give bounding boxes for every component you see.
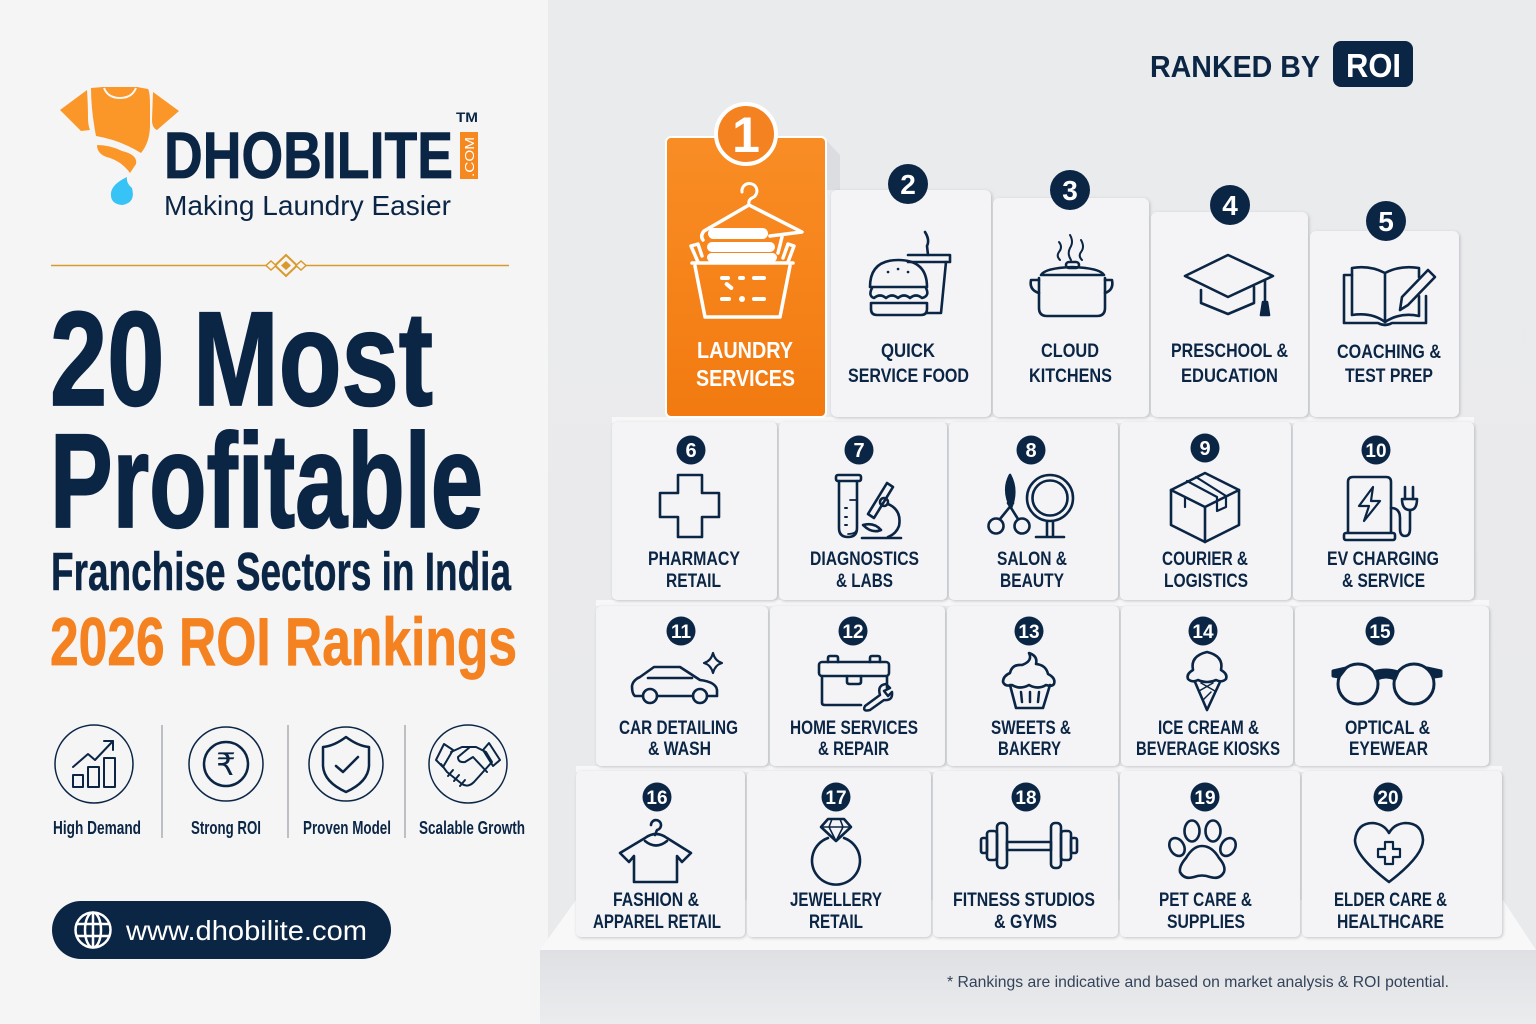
label: [1136, 718, 1280, 760]
label: PHARMACY: [648, 549, 740, 570]
label: HOME SERVICES: [790, 718, 918, 739]
floor platform: [0, 900, 1536, 1024]
logo: Dhobilite: [60, 87, 478, 221]
card 7: diagnostics and labs: [779, 422, 947, 600]
badge 3: [1050, 170, 1090, 210]
card 10: ev charging and service: [1293, 422, 1474, 600]
card 2: quick service food: [831, 164, 991, 417]
label: & GYMS: [994, 912, 1057, 933]
card 4: preschool and education: [1151, 185, 1308, 417]
label: JEWELLERY: [790, 890, 882, 911]
label: [997, 549, 1067, 592]
label: COACHING &: [1337, 342, 1441, 363]
label: BAKERY: [998, 739, 1061, 760]
icon: eyeglasses: [1333, 664, 1441, 704]
label: KITCHENS: [1029, 366, 1112, 387]
icon: book and pencil: [1344, 267, 1435, 325]
card 12: home services and repair: [770, 606, 945, 766]
label: [1029, 341, 1112, 387]
tagline: Making Laundry Easier: [164, 190, 451, 221]
feature: strong ROI: [189, 727, 263, 838]
divider with ornament: [51, 255, 509, 276]
label: & LABS: [836, 571, 893, 592]
label: COURIER &: [1162, 549, 1248, 570]
label: RETAIL: [666, 571, 721, 592]
icon: parcel box: [1171, 473, 1239, 542]
feature: scalable growth: Scalable Growth: [419, 818, 525, 838]
badge 18: [1012, 782, 1040, 812]
card 16: fashion and apparel retail: [576, 771, 745, 937]
label: APPAREL RETAIL: [593, 912, 721, 933]
icon: graduation cap: [1185, 255, 1273, 315]
badge 19: [1190, 782, 1220, 812]
card 19: pet care and supplies: [1120, 771, 1300, 937]
label: [1327, 549, 1439, 592]
label: & SERVICE: [1342, 571, 1425, 592]
icon: laundry basket: [691, 183, 802, 317]
badge 2: [888, 164, 928, 204]
badge 12: [838, 616, 868, 646]
icon: scissors and mirror: [988, 475, 1073, 537]
badge 18: 18: [1015, 788, 1037, 809]
label: LOGISTICS: [1164, 571, 1248, 592]
badge 6: 6: [685, 440, 697, 462]
badge 10: 10: [1365, 441, 1387, 462]
badge 8: 8: [1025, 440, 1037, 462]
title: 20 Most: [50, 285, 433, 434]
label: [1334, 890, 1447, 933]
badge 19: 19: [1194, 788, 1216, 809]
badge 12: 12: [842, 622, 864, 643]
feature separators: [162, 725, 405, 838]
badge 10: [1362, 436, 1390, 464]
label: QUICK: [881, 341, 935, 362]
label: ICE CREAM &: [1158, 718, 1259, 739]
badge 5: [1366, 201, 1406, 241]
label: SUPPLIES: [1167, 912, 1245, 933]
badge 9: 9: [1199, 438, 1211, 460]
label: BEVERAGE KIOSKS: [1136, 739, 1280, 760]
card 11: car detailing and wash: [596, 606, 768, 766]
label: [810, 549, 919, 592]
trademark: TM: [456, 109, 478, 125]
badge 17: [822, 782, 850, 812]
badge 1: 1: [732, 107, 760, 163]
badge 14: [1188, 616, 1218, 646]
label: HEALTHCARE: [1337, 912, 1444, 933]
badge 1: [716, 104, 776, 164]
label: OPTICAL &: [1345, 718, 1430, 739]
badge 5: 5: [1378, 206, 1394, 237]
title: Franchise Sectors in India: [51, 542, 512, 602]
icon: car with sparkle: [632, 653, 722, 703]
website pill: [52, 901, 391, 959]
feature: proven model: [303, 727, 391, 838]
icon: heart with plus: [1355, 823, 1423, 882]
card 9: courier and logistics: [1120, 422, 1291, 600]
card 13: sweets and bakery: [947, 606, 1119, 766]
website url: www.dhobilite.com: [125, 915, 367, 946]
badge 6: [676, 436, 706, 464]
badge 11: 11: [671, 622, 691, 643]
label: [790, 890, 882, 933]
card 6: pharmacy retail: [612, 422, 777, 600]
.com tag: .COM: [462, 137, 477, 177]
badge 9: [1190, 434, 1220, 462]
icon: ev charger: [1344, 477, 1417, 540]
stair band shading: [576, 417, 1502, 772]
badge 15: [1366, 616, 1394, 646]
label: PET CARE &: [1159, 890, 1252, 911]
icon: cooking pot: [1031, 235, 1112, 316]
card 18: fitness studios and gyms: [933, 771, 1118, 937]
card 15: optical and eyewear: [1295, 606, 1489, 766]
label: SWEETS &: [991, 718, 1071, 739]
badge 13: [1014, 616, 1044, 646]
ranked by ROI heading: RANKED BY: [1150, 49, 1320, 84]
card 17: jewellery retail: [747, 771, 931, 937]
badge 16: 16: [646, 788, 668, 809]
label: [953, 890, 1095, 933]
label: LAUNDRY: [697, 337, 793, 363]
label: [593, 890, 721, 933]
badge 17: 17: [825, 788, 847, 809]
label: [991, 718, 1071, 760]
label: [1171, 341, 1288, 387]
label: ELDER CARE &: [1334, 890, 1447, 911]
feature: high demand: [53, 725, 141, 838]
badge 20: [1374, 782, 1402, 812]
badge 7: 7: [853, 440, 865, 462]
badge 7: [844, 436, 874, 464]
icon: test tube and microscope: [836, 475, 901, 538]
label: PRESCHOOL &: [1171, 341, 1288, 362]
label: SERVICE FOOD: [848, 366, 969, 387]
badge 3: 3: [1062, 175, 1078, 206]
card 3: cloud kitchens: [993, 170, 1149, 417]
icon: toolbox and wrench: [819, 656, 892, 710]
footnote: * Rankings are indicative and based on market analysis & ROI potential.: [947, 974, 1449, 991]
.com tag: [460, 132, 478, 179]
icon: medical cross: [660, 475, 719, 537]
feature: proven model: Proven Model: [303, 818, 391, 838]
feature: strong ROI: ₹: [216, 747, 236, 783]
badge 2: 2: [900, 169, 916, 200]
label: EDUCATION: [1181, 366, 1278, 387]
feature: scalable growth: [419, 725, 525, 838]
label: [1159, 890, 1252, 933]
label: FASHION &: [613, 890, 699, 911]
feature icons row: [53, 725, 525, 838]
label: EV CHARGING: [1327, 549, 1439, 570]
label: TEST PREP: [1345, 366, 1433, 387]
label: & WASH: [648, 739, 711, 760]
feature: strong ROI: Strong ROI: [191, 818, 261, 838]
icon: diamond ring: [812, 819, 860, 885]
title: 2026 ROI Rankings: [50, 604, 517, 680]
badge 4: 4: [1222, 190, 1238, 221]
feature: high demand: High Demand: [53, 818, 141, 838]
panel: right background: [540, 0, 1536, 1024]
icon: ice cream cone: [1188, 652, 1226, 710]
badge 20: 20: [1377, 788, 1399, 809]
logo wordmark: DHOBILITE: [164, 118, 453, 192]
label: [1345, 718, 1430, 760]
badge 16: [642, 782, 672, 812]
label: [619, 718, 738, 760]
label: [1337, 342, 1441, 387]
label: & REPAIR: [818, 739, 889, 760]
title: [50, 285, 517, 680]
label: CLOUD: [1041, 341, 1099, 362]
label: [848, 341, 969, 387]
panel: left background: [0, 0, 548, 950]
title: Profitable: [50, 407, 483, 556]
badge 13: 13: [1018, 622, 1040, 643]
badge 11: [666, 616, 696, 646]
ranked by ROI heading: ROI: [1346, 47, 1401, 84]
icon: t-shirt on hanger: [620, 820, 691, 882]
icon: globe: [76, 912, 110, 948]
label: BEAUTY: [1000, 571, 1064, 592]
icon: paw print: [1166, 820, 1239, 878]
badge 15: 15: [1369, 622, 1391, 643]
card 5: coaching and test prep: [1310, 201, 1459, 417]
label: EYEWEAR: [1349, 739, 1428, 760]
label: CAR DETAILING: [619, 718, 738, 739]
badge 4: [1210, 185, 1250, 225]
card 20: elder care and healthcare: [1302, 771, 1502, 937]
icon: burger and drink: [870, 232, 950, 315]
label: FITNESS STUDIOS: [953, 890, 1095, 911]
label: [1162, 549, 1248, 592]
badge 14: 14: [1192, 622, 1214, 643]
label: [648, 549, 740, 592]
icon: orange t-shirt with water drop: [60, 87, 179, 205]
label: DIAGNOSTICS: [810, 549, 919, 570]
label: SERVICES: [696, 365, 795, 391]
card 14: ice cream and beverage kiosks: [1121, 606, 1293, 766]
label: SALON &: [997, 549, 1067, 570]
label: [696, 337, 795, 391]
icon: dumbbell: [981, 823, 1077, 868]
ranked by ROI heading: [1150, 41, 1413, 87]
label: RETAIL: [809, 912, 863, 933]
card 8: salon and beauty: [949, 422, 1118, 600]
card 1: laundry services: [666, 104, 840, 417]
icon: cupcake: [1003, 653, 1054, 708]
badge 8: [1016, 436, 1046, 464]
label: [790, 718, 918, 760]
